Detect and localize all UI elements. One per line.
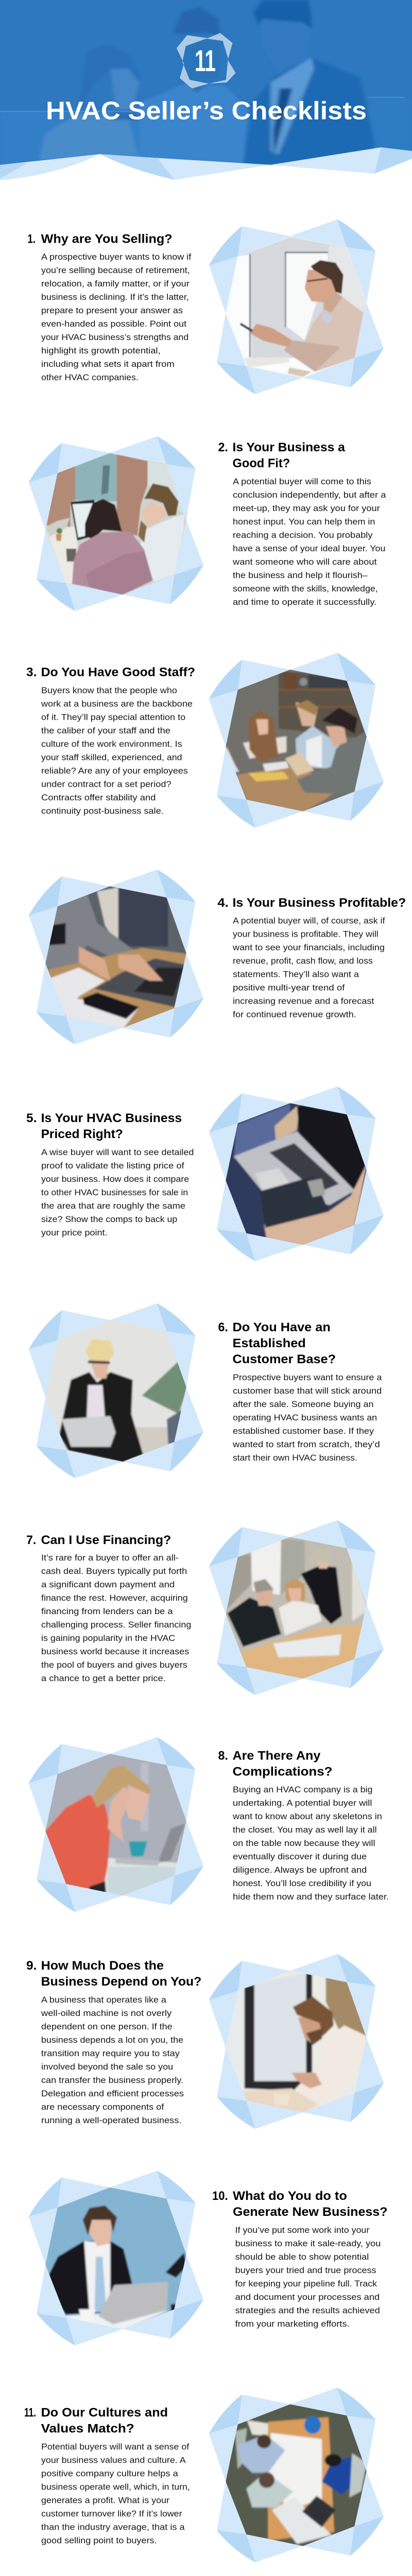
heading: Do You Have an xyxy=(233,1320,331,1334)
body text: for continued revenue growth. xyxy=(233,1010,356,1019)
heading: Values Match? xyxy=(41,2421,134,2436)
body text: hide them now and they surface later. xyxy=(233,1892,389,1902)
body text: your business values and culture. A xyxy=(41,2455,186,2465)
body text: relocation, a family matter, or if your xyxy=(41,279,190,289)
photo frame: overhead team around blueprint table xyxy=(209,2387,384,2563)
hero wave facets xyxy=(0,147,412,180)
body text: after the sale. Someone buying an xyxy=(233,1400,374,1409)
heading xyxy=(26,1111,182,1141)
body text: work at a business are the backbone xyxy=(41,700,193,709)
body text: from your marketing efforts. xyxy=(235,2319,349,2329)
body text: honest input. You can help them in xyxy=(233,517,375,527)
photo frame: man with phone xyxy=(209,219,384,394)
heading: 11. xyxy=(24,2406,36,2419)
body text xyxy=(232,1785,389,1902)
heading: Good Fit? xyxy=(233,456,290,470)
body text: conclusion independently, but after a xyxy=(233,490,386,500)
photo frame: laptop and calculator xyxy=(209,1087,384,1261)
body text: want to see your financials, including xyxy=(232,943,385,952)
body text: strategies and the results achieved xyxy=(235,2306,380,2315)
body text: operating HVAC business wants an xyxy=(233,1413,377,1422)
body text: well-oiled machine is not overly xyxy=(41,2009,172,2018)
body text: business to make it sale-ready, you xyxy=(235,2239,381,2248)
panel: 7 can i use financing xyxy=(26,1520,384,1695)
body text: proof to validate the listing price of xyxy=(41,1161,184,1171)
body text: financing from lenders can be a xyxy=(41,1607,174,1616)
body text xyxy=(41,252,192,382)
panel: 4 is your business profitable xyxy=(29,870,406,1044)
body text: A wise buyer will want to see detailed xyxy=(41,1148,194,1157)
panel: 10 what do you do to generate new business xyxy=(29,2171,387,2345)
body text: Buying an HVAC company is a big xyxy=(233,1785,372,1794)
panel: 5 is your hvac business priced right xyxy=(26,1086,384,1261)
body text xyxy=(232,916,385,1019)
body text: statements. They’ll also want a xyxy=(233,970,359,979)
body text xyxy=(232,477,386,607)
body text: It’s rare for a buyer to offer an all- xyxy=(41,1553,179,1563)
body text: positive multi-year trend of xyxy=(233,983,345,992)
body text: A potential buyer will come to this xyxy=(233,477,371,486)
body text: meet-up, they may ask you for your xyxy=(233,504,380,513)
heading: 4. xyxy=(217,896,229,910)
body text: running a well-operated business. xyxy=(41,2116,181,2125)
body text: Prospective buyers want to ensure a xyxy=(233,1373,382,1382)
body text: established customer base. If they xyxy=(233,1427,374,1436)
heading: 9. xyxy=(26,1959,37,1973)
heading: 6. xyxy=(218,1320,228,1334)
body text xyxy=(232,1373,382,1463)
body text: customer turnover like? If it’s lower xyxy=(41,2509,182,2518)
heading: Complications? xyxy=(233,1765,332,1778)
body text: If you’ve put some work into your xyxy=(235,2226,370,2235)
body text: want to know about any skeletons in xyxy=(232,1812,382,1821)
body text: including what sets it apart from xyxy=(41,360,175,369)
body text: Delegation and efficient processes xyxy=(41,2089,184,2098)
heading: Are There Any xyxy=(233,1749,321,1763)
panel: 1 why are you selling xyxy=(28,219,384,394)
body text: positive company culture helps a xyxy=(41,2469,179,2478)
badge: number 11 xyxy=(177,33,236,89)
panel: 11 do our cultures and values match xyxy=(24,2387,384,2563)
body text: generates a profit. What is your xyxy=(41,2496,170,2505)
body text: A prospective buyer wants to know if xyxy=(41,252,192,262)
body text: a significant down payment and xyxy=(41,1580,175,1589)
body text: business is declining. If it’s the latter, xyxy=(41,293,189,302)
body text: is gaining popularity in the HVAC xyxy=(41,1634,175,1643)
body text: diligence. Always be upfront and xyxy=(233,1866,367,1875)
body text: under contract for a set period? xyxy=(41,780,171,789)
heading: Customer Base? xyxy=(233,1352,336,1366)
body text: someone with the skills, knowledge, xyxy=(233,584,378,594)
body text: good selling point to buyers. xyxy=(41,2536,157,2545)
body text: to other HVAC businesses for sale in xyxy=(41,1188,188,1197)
heading xyxy=(218,1749,332,1778)
body text: Contracts offer stability and xyxy=(41,793,156,803)
body text: of it. They’ll pay special attention to xyxy=(41,713,185,722)
heading xyxy=(24,2406,168,2436)
heading: How Much Does the xyxy=(41,1959,164,1973)
body text: business world because it increases xyxy=(41,1647,189,1656)
body text: should be able to show potential xyxy=(235,2252,369,2262)
hero photo: three people in blue duotone xyxy=(0,0,412,166)
body text: Buyers know that the people who xyxy=(41,686,177,696)
body text: reliable? Are any of your employees xyxy=(41,767,188,776)
photo frame: three colleagues reviewing charts xyxy=(209,1520,384,1695)
heading xyxy=(26,1959,201,1989)
body text: revenue, profit, cash flow, and loss xyxy=(233,956,373,965)
body text: want someone who will care about xyxy=(232,557,377,567)
photo frame: woman thinking with laptop and plant xyxy=(29,1303,203,1478)
body text: continuity post-business sale. xyxy=(41,807,164,816)
hero banner xyxy=(0,0,412,180)
body text: have a sense of your ideal buyer. You xyxy=(233,544,385,553)
heading: 1. xyxy=(28,232,36,246)
body text: your HVAC business’s strengths and xyxy=(41,333,188,342)
heading: 2. xyxy=(218,440,228,454)
heading: Generate New Business? xyxy=(233,2205,387,2219)
body text: the caliber of your staff and the xyxy=(41,726,170,736)
heading: Established xyxy=(233,1336,306,1350)
body text: highlight its growth potential, xyxy=(41,346,161,355)
body text: Potential buyers will want a sense of xyxy=(41,2442,190,2451)
body text: your business is profitable. They will xyxy=(233,929,379,939)
heading xyxy=(218,1320,336,1366)
body text: dependent on one person. If the xyxy=(41,2022,173,2031)
body text: involved beyond the sale so you xyxy=(41,2062,173,2072)
body text: the closet. You may as well lay it all xyxy=(233,1825,377,1835)
body text: honest. You’ll lose credibility if you xyxy=(233,1879,371,1888)
panel: 9 how much does the business depend on you xyxy=(26,1954,384,2129)
body text: can transfer the business properly. xyxy=(41,2076,183,2085)
heading: 7. xyxy=(26,1533,36,1547)
photo frame: three people studying at table xyxy=(209,653,384,827)
body text: transition may require you to stay xyxy=(41,2049,180,2058)
body text: your business. How does it compare xyxy=(41,1175,189,1184)
heading: What do You do to xyxy=(233,2189,347,2203)
panel: 3 do you have good staff xyxy=(26,653,384,827)
body text xyxy=(41,1995,184,2125)
body text: your staff skilled, experienced, and xyxy=(41,753,182,762)
body text: undertaking. A potential buyer will xyxy=(233,1799,372,1808)
body text: size? Show the comps to back up xyxy=(41,1215,177,1224)
body text xyxy=(41,1148,194,1238)
body text: business operate well, which, in turn, xyxy=(41,2482,190,2492)
body text: reaching a decision. You probably xyxy=(233,531,373,540)
body text xyxy=(41,686,193,816)
body text xyxy=(235,2226,381,2329)
body text: on the table now because they will xyxy=(233,1839,375,1848)
body text: the business and help it flourish– xyxy=(233,571,368,580)
body text: the area that are roughly the same xyxy=(41,1201,185,1211)
body text: your price point. xyxy=(41,1228,108,1238)
heading xyxy=(212,2189,387,2219)
body text: buyers your tried and true process xyxy=(235,2266,376,2275)
heading: Priced Right? xyxy=(41,1127,123,1141)
body text: challenging process. Seller financing xyxy=(41,1620,191,1630)
photo frame: man checking phone by window xyxy=(209,1954,384,2129)
heading: Is Your Business a xyxy=(233,440,345,454)
panel: 8 are there any complications xyxy=(29,1737,389,1912)
body text: start their own HVAC business. xyxy=(233,1453,357,1463)
body text: even-handed as possible. Point out xyxy=(41,319,187,329)
body text: the pool of buyers and gives buyers xyxy=(41,1660,187,1670)
title: HVAC Seller’s Checklists xyxy=(46,97,367,125)
body text: wanted to start from scratch, they’d xyxy=(232,1440,380,1449)
body text xyxy=(41,1553,191,1683)
body text: other HVAC companies. xyxy=(41,373,139,382)
body text: you’re selling because of retirement, xyxy=(41,266,190,275)
body text: A business that operates like a xyxy=(41,1995,167,2005)
heading: 5. xyxy=(26,1111,37,1125)
body text: customer base that will stick around xyxy=(233,1386,382,1396)
heading: Can I Use Financing? xyxy=(41,1533,171,1547)
photo frame: businessman with laptop on blue background xyxy=(29,2171,203,2345)
body text: culture of the work environment. Is xyxy=(41,740,182,749)
body text: than the industry average, that is a xyxy=(41,2522,185,2532)
body text: for keeping your pipeline full. Track xyxy=(235,2279,377,2289)
heading: Why are You Selling? xyxy=(41,232,173,246)
heading: Is Your HVAC Business xyxy=(41,1111,182,1125)
body text: and time to operate it successfully. xyxy=(233,598,376,607)
body text: increasing revenue and a forecast xyxy=(233,996,374,1006)
body text: A potential buyer will, of course, ask if xyxy=(233,916,385,925)
body text: business depends a lot on you, the xyxy=(41,2036,183,2045)
panel: 6 do you have an established customer base xyxy=(29,1303,382,1478)
body text: cash deal. Buyers typically put forth xyxy=(41,1567,187,1576)
panel: 2 is your business a good fit xyxy=(29,436,386,611)
body text: a chance to get a better price. xyxy=(41,1674,166,1683)
body text xyxy=(41,2442,190,2545)
heading: 8. xyxy=(218,1749,228,1763)
body text: eventually discover it during due xyxy=(233,1852,367,1861)
badge: number 11: 11 xyxy=(195,44,216,78)
photo frame: two women at a computer xyxy=(29,436,203,611)
heading: 10. xyxy=(212,2189,228,2203)
photo frame: hands on laptop with calculator xyxy=(29,870,203,1044)
body text: and document your processes and xyxy=(235,2293,380,2302)
heading: Is Your Business Profitable? xyxy=(233,896,406,910)
body text: prepare to present your answer as xyxy=(41,306,183,315)
heading xyxy=(218,440,345,470)
body text: are necessary components of xyxy=(41,2103,164,2112)
heading: 3. xyxy=(26,666,37,679)
photo frame: stressed woman at laptop xyxy=(29,1737,203,1912)
heading: Do You Have Good Staff? xyxy=(41,666,195,679)
heading: Business Depend on You? xyxy=(41,1975,201,1989)
heading: Do Our Cultures and xyxy=(41,2406,168,2419)
body text: finance the rest. However, acquiring xyxy=(41,1594,188,1603)
